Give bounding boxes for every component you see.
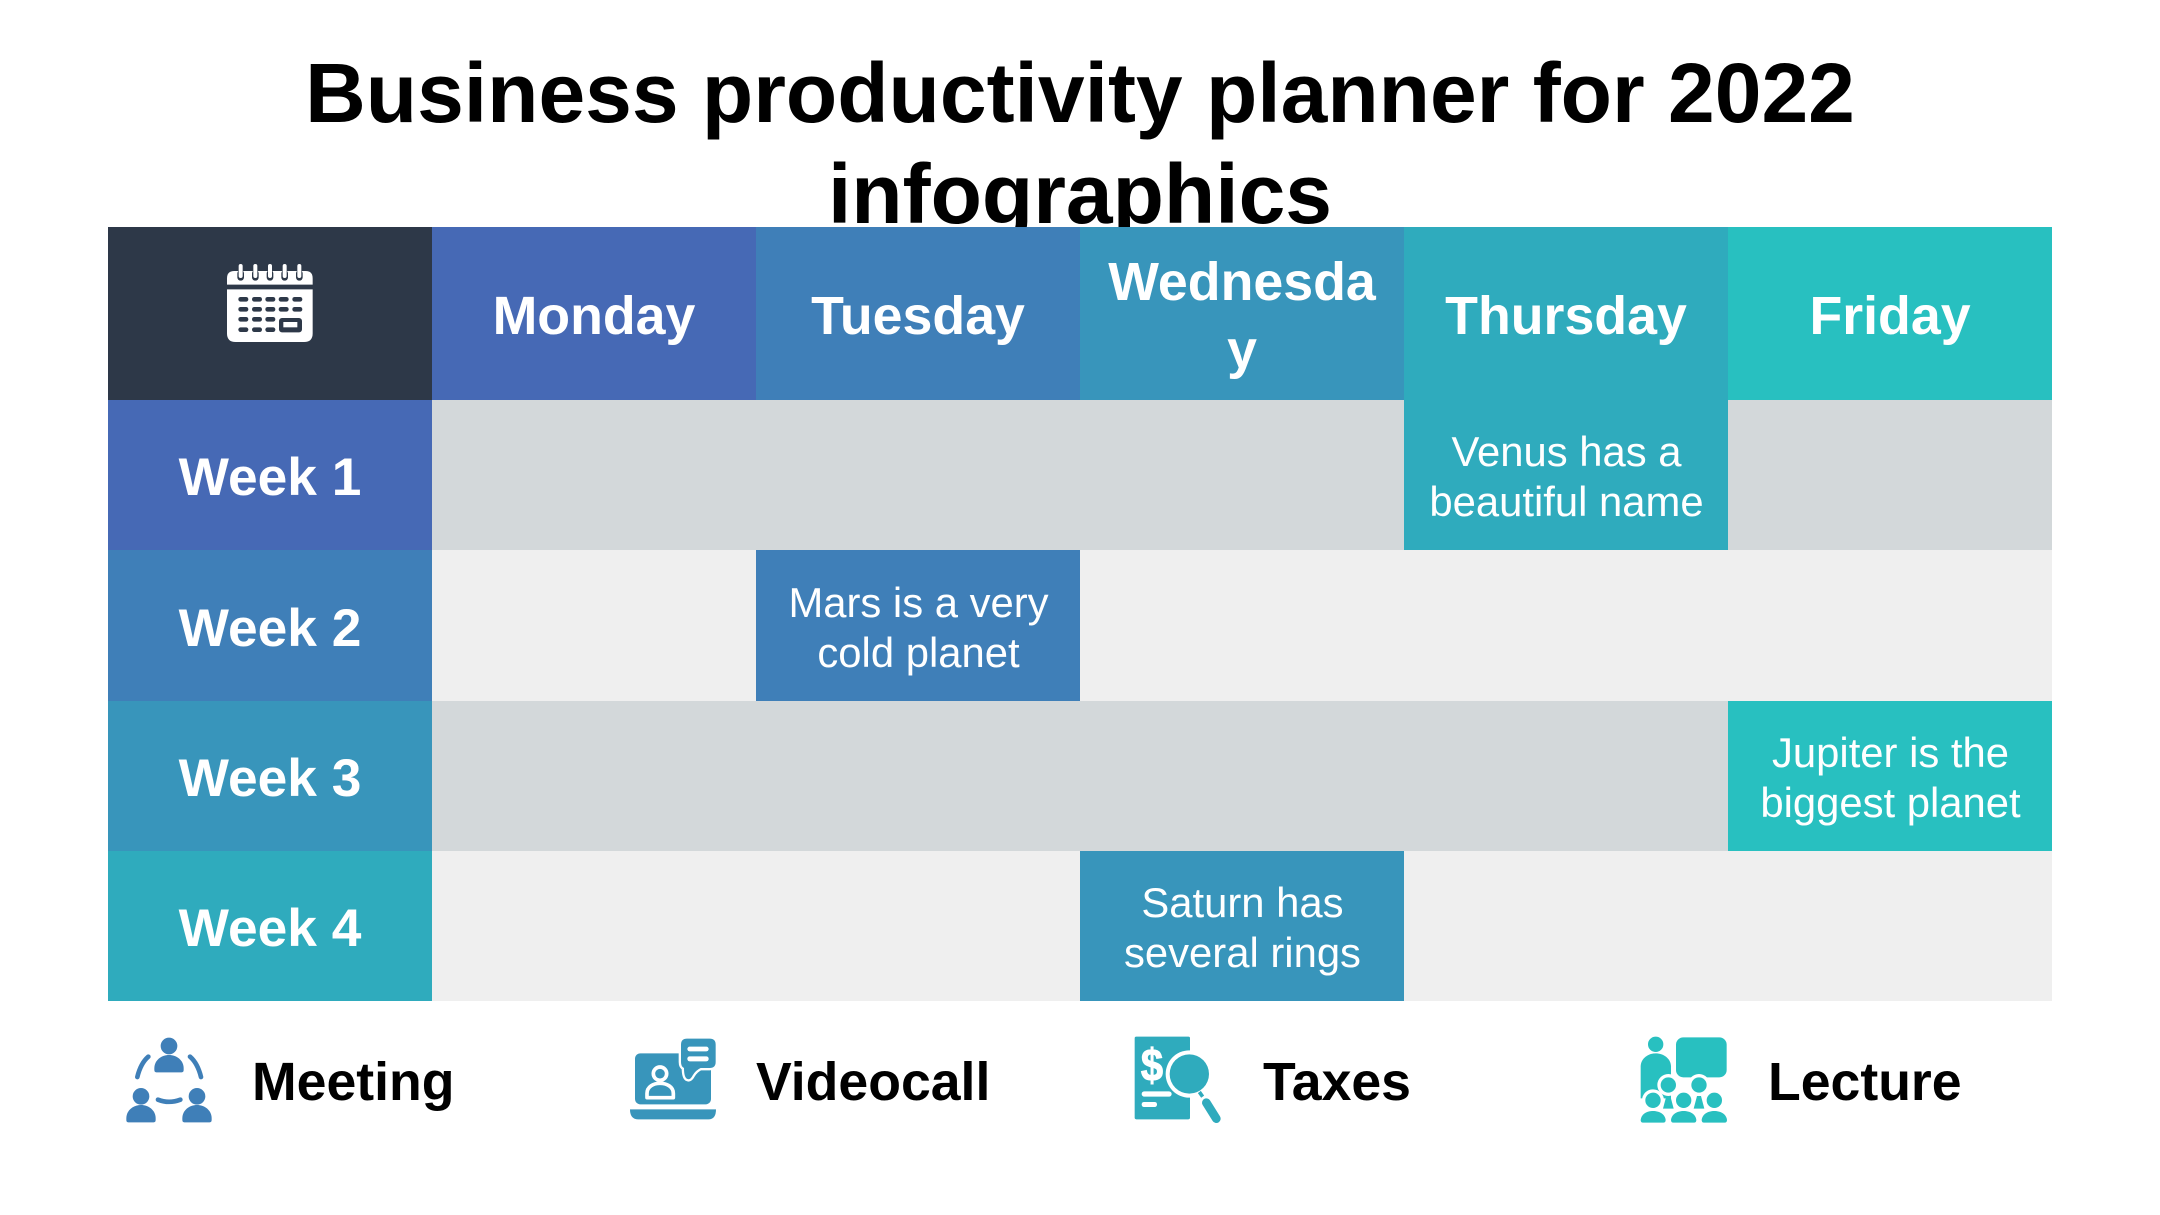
event: Mars: Mars is a very	[788, 578, 1049, 626]
header: Tuesday: Tuesday	[811, 286, 1025, 346]
row label: Week 1	[108, 400, 432, 550]
header: Thursday	[1404, 227, 1728, 400]
row label: Week 4: Week 4	[179, 899, 361, 958]
header: Wednesday: y	[1227, 320, 1257, 380]
label: Lecture: Lecture	[1768, 1052, 1962, 1112]
icon: taxes	[1134, 1036, 1221, 1123]
row label: Week 2	[108, 550, 432, 701]
icon: lecture	[1640, 1036, 1727, 1123]
label: Taxes: Taxes	[1263, 1052, 1411, 1112]
row band: week 3	[432, 701, 2052, 851]
header: Friday	[1728, 227, 2052, 400]
icon: meeting	[126, 1038, 212, 1122]
event: Saturn: several rings	[1124, 929, 1361, 976]
event: Mars	[756, 550, 1080, 701]
event: Jupiter: biggest planet	[1760, 779, 2021, 826]
row band: week 2	[432, 550, 2052, 701]
row label: Week 3	[108, 701, 432, 851]
header: calendar cell	[108, 227, 432, 400]
header: Monday: Monday	[493, 286, 695, 346]
header: Monday	[432, 227, 756, 400]
planner table	[108, 227, 2052, 1001]
row label: Week 2: Week 2	[179, 598, 361, 658]
icon: calendar	[227, 264, 313, 342]
label: Meeting: Meeting	[252, 1052, 454, 1112]
header: Wednesday	[1080, 227, 1404, 400]
title	[305, 46, 1855, 241]
title: infographics	[828, 147, 1332, 241]
event: Venus: beautiful name	[1429, 478, 1704, 525]
legend: Meeting	[126, 1038, 454, 1122]
event: Venus: Venus has a	[1451, 428, 1682, 475]
title: Business productivity planner for 2022	[305, 46, 1855, 140]
event: Jupiter	[1728, 701, 2052, 851]
event: Venus	[1404, 400, 1728, 550]
label: Videocall: Videocall	[756, 1052, 990, 1112]
row band: week 4	[432, 851, 2052, 1001]
row label: Week 3: Week 3	[179, 749, 361, 808]
legend: Lecture	[1640, 1036, 1962, 1123]
header: Friday: Friday	[1809, 286, 1971, 346]
row label: Week 4	[108, 851, 432, 1001]
header: Tuesday	[756, 227, 1080, 400]
header: Wednesday: Wednesda	[1108, 252, 1376, 312]
event: Saturn	[1080, 851, 1404, 1001]
event: Mars: cold planet	[817, 628, 1020, 676]
event: Saturn: Saturn has	[1141, 879, 1344, 926]
icon: videocall	[630, 1038, 716, 1120]
row label: Week 1: Week 1	[179, 448, 361, 507]
legend: Taxes	[1134, 1036, 1411, 1123]
legend: Videocall	[630, 1038, 990, 1120]
event: Jupiter: Jupiter is the	[1772, 729, 2009, 776]
icon: taxes: $	[1141, 1040, 1163, 1091]
row band: week 1	[432, 400, 2052, 550]
header: Thursday: Thursday	[1445, 286, 1687, 346]
